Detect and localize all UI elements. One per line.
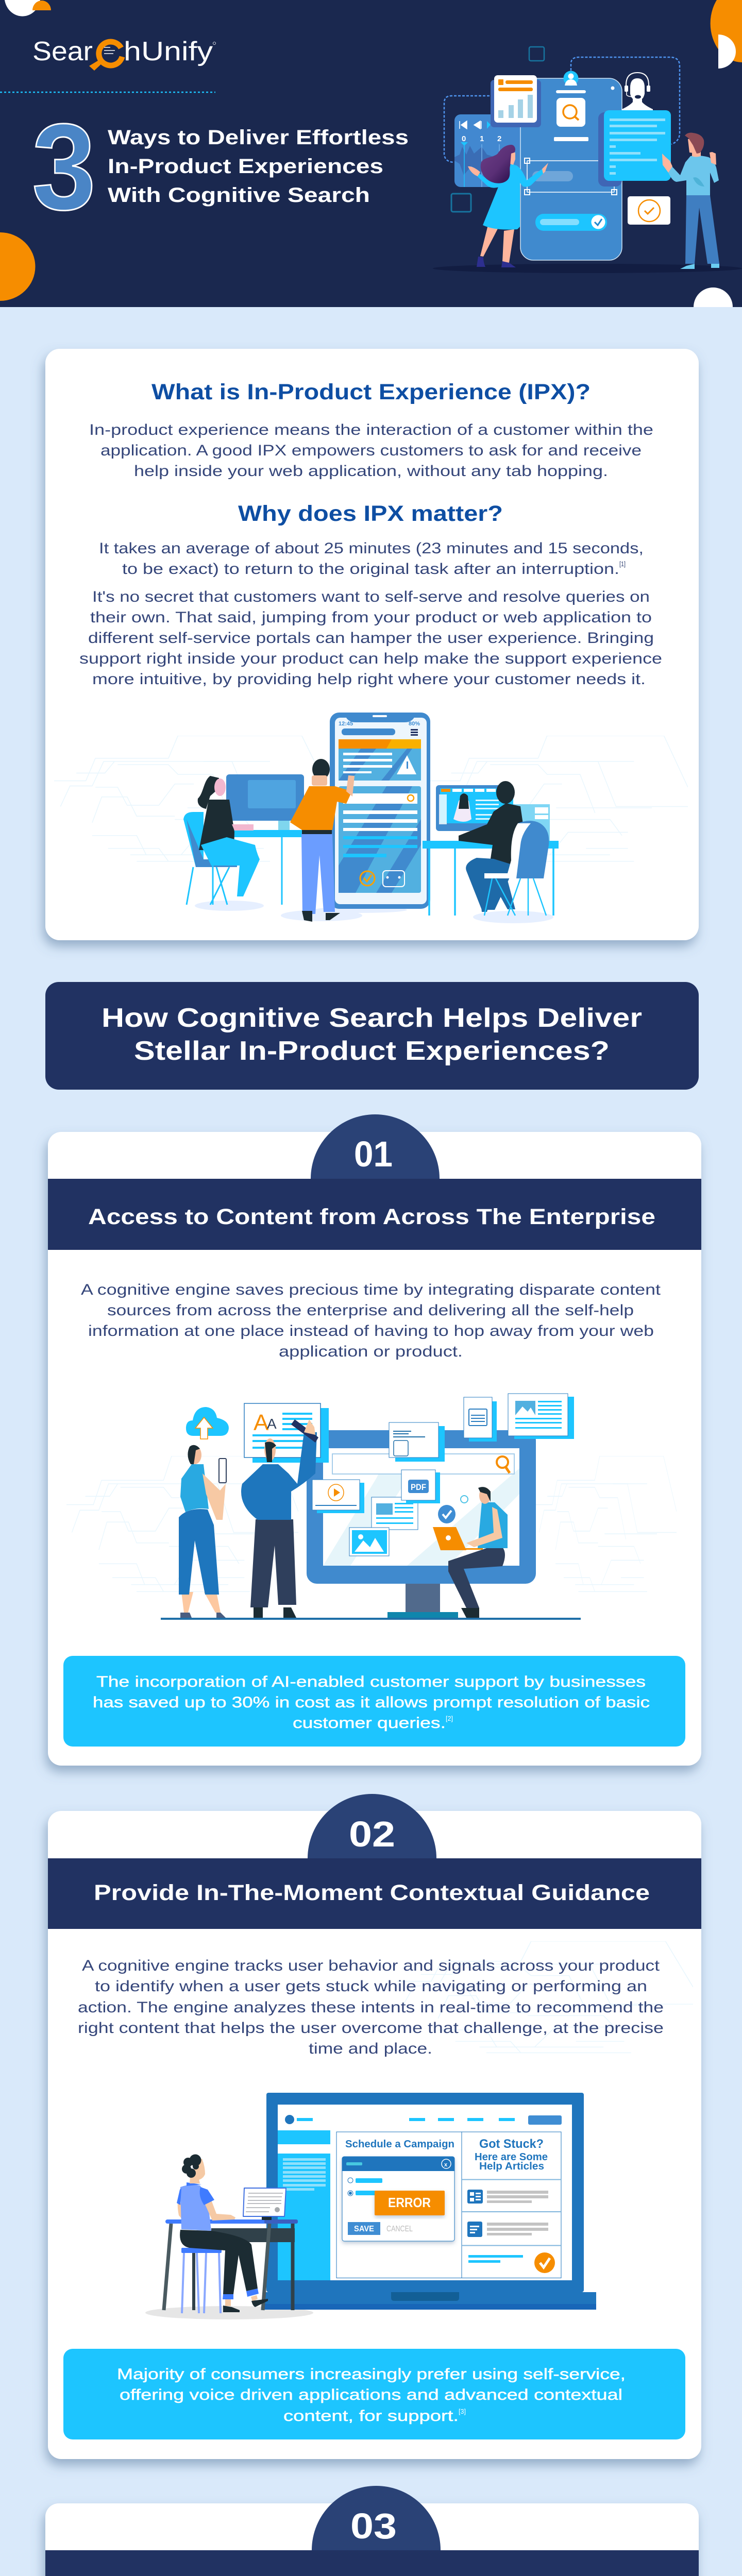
audio panel: 1 [480,134,484,143]
avatar [564,71,578,86]
center man [290,759,355,922]
cloud upload icon [186,1407,229,1439]
number badge 01 [311,1114,440,1179]
title [108,126,409,207]
step description: application or product. [279,1343,463,1360]
text block: definition: application. A good IPX empowers customers to ask for and receive [100,442,642,459]
text block: definition: help inside your web application, without any tab hopping. [134,463,608,480]
step description: A cognitive engine tracks user behavior and signals across your product [82,1957,660,1974]
dialog with error [342,2157,454,2241]
floating media cards [312,1470,456,1556]
title: With Cognitive Search [108,184,370,207]
help agent card [598,73,671,187]
panel: step 01 [48,1114,701,1766]
text block: why it matters: more intuitive, by providing help right where your customer needs it. [92,671,646,688]
audio panel: 2 [497,134,501,143]
callout: self-service preference: Majority of consumers increasingly prefer using self-service, [117,2366,626,2383]
right desk and man [423,781,559,916]
illustration: contextual guidance laptop [145,2093,596,2319]
dialog with error: x [444,2162,448,2168]
number badge 02: 02 [349,1814,395,1854]
article panel: Help Articles [479,2161,544,2172]
chart card [491,75,541,127]
step description: time and place. [309,2040,432,2057]
decorative shapes [0,0,742,307]
logo: Sear [32,37,93,66]
callout: self-service preference: content, for support. [283,2408,459,2425]
phone: 80% [409,721,420,727]
number badge 03: 03 [350,2506,397,2546]
seated person with laptop [433,1487,508,1618]
logo: hUnify [124,37,213,66]
illustration: people using in-product help [54,713,688,923]
step description: information at one place instead of having to hop away from your web [88,1323,654,1340]
hero illustration [433,47,742,273]
man writing [241,1419,318,1618]
step description [81,1281,661,1360]
text block: why it matters: their own. That said, jumping from your product or web application to [90,609,652,626]
title: In-Product Experiences [108,155,383,178]
big number 3: 3 [32,99,96,235]
heading: why does IPX matter: Why does IPX matter? [238,501,503,526]
callout: 30 percent cost saving: has saved up to 30% in cost as it allows prompt resolution of basic [93,1694,650,1711]
document cards [244,1394,574,1463]
heading banner: how cognitive search helps [45,982,699,1090]
monitor [307,1430,536,1618]
left desk and woman [183,774,304,905]
heading banner: how cognitive search helps: How Cognitive Search Helps Deliver [102,1003,642,1033]
step description: sources from across the enterprise and delivering all the self-help [107,1302,634,1319]
number badge 02 [308,1794,436,1858]
step title bar [45,2550,699,2576]
man [662,133,719,269]
hero banner [0,0,742,307]
callout: 30 percent cost saving: customer queries. [293,1715,446,1732]
callout: self-service preference: offering voice driven applications and advanced contextual [120,2386,622,2403]
callout: self-service preference: [3] [459,2408,466,2415]
panel: what is IPX [45,349,699,940]
dialog with error: CANCEL [386,2225,413,2233]
text block: why it matters: It takes an average of about 25 minutes (23 minutes and 15 seconds, [99,540,644,557]
dialog with error: SAVE [354,2225,374,2233]
panel: step 03 [45,2486,699,2576]
heading banner: how cognitive search helps: Stellar In-Product Experiences? [134,1036,610,1066]
woman [468,145,548,267]
phone [520,78,622,260]
dialog with error: ERROR [388,2195,431,2210]
callout: 30 percent cost saving: [2] [446,1715,453,1722]
illustration: enterprise content [66,1394,677,1620]
article panel: Schedule a Campaign [345,2139,454,2150]
article panel: Got Stuck? [479,2137,544,2151]
step description [78,1957,664,2057]
step title bar [48,1858,701,1929]
step description: to identify when a user gets stuck while navigating or performing an [95,1978,647,1995]
phone: 12:45 [339,721,353,727]
text block: why it matters: to be exact) to return to the original task after an interruption. [122,561,619,578]
logo [32,37,215,71]
document cards: A [267,1416,277,1432]
heading: what is in-product experience: What is In-Product Experience (IPX)? [151,380,591,404]
step description: action. The engine analyzes these intents in real-time to recommend the [78,1999,664,2016]
text block: why it matters: support right inside your product can help make the support experience [79,650,662,667]
text block: why it matters [79,540,662,688]
number badge 03 [312,2486,441,2550]
step title bar [48,1179,701,1250]
number badge 01: 01 [354,1134,393,1174]
step title bar: Access to Content from Across The Enterprise [88,1205,655,1229]
callout: 30 percent cost saving [63,1656,685,1747]
phone [330,713,430,909]
callout: self-service preference [63,2349,685,2439]
audio panel: 0 [462,134,466,143]
text block: why it matters: [1] [619,560,626,568]
text block: why it matters: It's no secret that customers want to self-serve and resolve queries on [92,588,650,605]
article panel: Here are Some [475,2151,548,2163]
title: Ways to Deliver Effortless [108,126,409,149]
check card [628,196,670,225]
article panel [336,2132,561,2278]
text block: why it matters: different self-service portals can hamper the user experience. Bringing [88,630,654,647]
floating media cards: PDF [411,1482,426,1492]
text block: definition [89,421,653,480]
step description: right content that helps the user overcome that challenge, at the precise [78,2020,664,2037]
laptop [263,2093,596,2310]
person at desk [164,2155,298,2313]
woman with phone [179,1445,226,1618]
step description: A cognitive engine saves precious time by integrating disparate content [81,1281,661,1298]
document cards: A [254,1410,269,1435]
audio panel [454,114,521,187]
callout: 30 percent cost saving: The incorporation of AI-enabled customer support by businesses [96,1673,646,1690]
step title bar: Provide In-The-Moment Contextual Guidance [94,1880,650,1905]
panel: step 02 [48,1794,701,2459]
text block: definition: In-product experience means the interaction of a customer within the [89,421,653,438]
